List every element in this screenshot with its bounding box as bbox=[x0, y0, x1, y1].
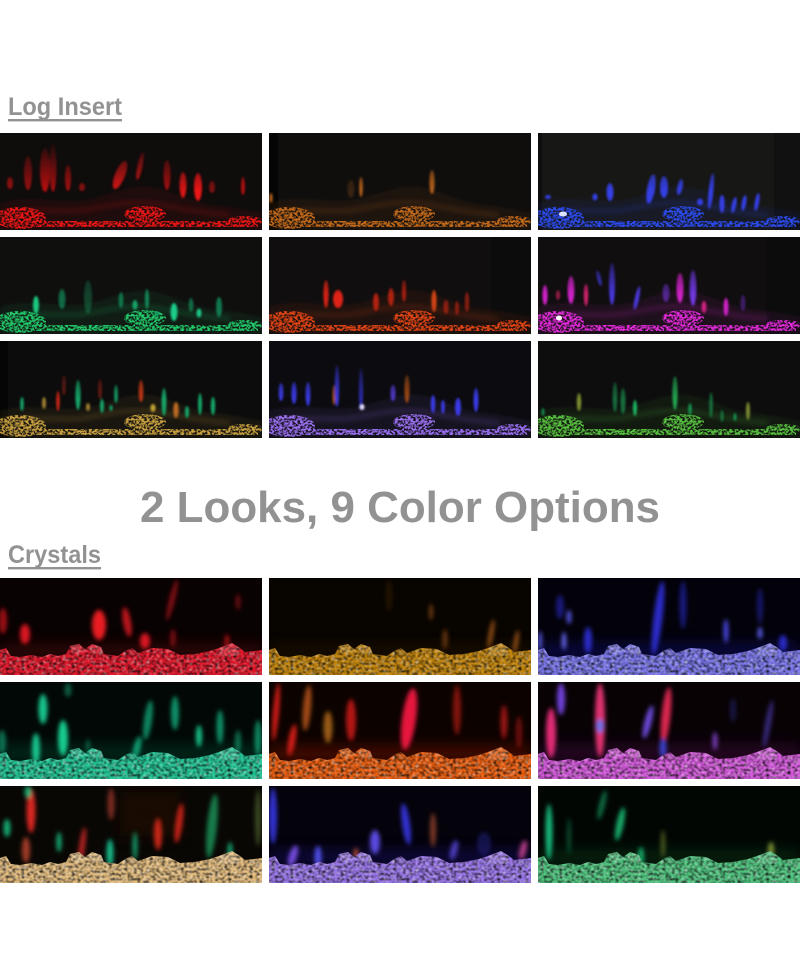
panel: crystals orange bbox=[269, 682, 531, 779]
logs bbox=[0, 290, 263, 334]
crystals bbox=[538, 643, 800, 675]
crystals bbox=[0, 851, 262, 883]
panel: log insert orange-red bbox=[269, 237, 531, 334]
flames bbox=[386, 580, 520, 654]
flames bbox=[269, 788, 529, 868]
flames bbox=[542, 376, 750, 422]
crystals bbox=[269, 747, 531, 779]
heading: Crystals: Crystals bbox=[8, 541, 101, 569]
flames bbox=[33, 280, 222, 321]
flames bbox=[270, 683, 522, 756]
crystals bbox=[0, 747, 262, 779]
logs bbox=[532, 394, 800, 438]
logs bbox=[263, 394, 532, 438]
flames bbox=[269, 170, 435, 203]
panel: crystals purple bbox=[269, 786, 531, 883]
crystals bbox=[269, 643, 531, 675]
panel: crystals amber bbox=[269, 578, 531, 675]
panel: log insert red bbox=[0, 133, 262, 230]
flames bbox=[0, 683, 262, 765]
panel: crystals green bbox=[538, 786, 800, 883]
highlight bbox=[360, 404, 364, 410]
panel: log insert violet bbox=[269, 341, 531, 438]
panel: crystals magenta bbox=[538, 682, 800, 779]
logs bbox=[532, 186, 800, 230]
panel: log insert amber bbox=[269, 133, 531, 230]
panel: crystals multi-colour cream bbox=[0, 786, 262, 883]
panel: log insert magenta bbox=[538, 237, 800, 334]
logs bbox=[0, 394, 263, 438]
flames bbox=[7, 144, 245, 201]
panel: log insert blue bbox=[538, 133, 800, 230]
logs bbox=[0, 186, 263, 230]
panel: log insert green-yellow bbox=[538, 341, 800, 438]
highlight bbox=[559, 212, 567, 216]
flames bbox=[4, 786, 261, 867]
flames bbox=[20, 375, 215, 418]
panel: crystals teal-green bbox=[0, 682, 262, 779]
crystals bbox=[269, 851, 531, 883]
panel: crystals blue bbox=[538, 578, 800, 675]
crystals bbox=[538, 851, 800, 883]
panel: log insert green bbox=[0, 237, 262, 334]
flames bbox=[546, 683, 775, 758]
flames bbox=[323, 280, 469, 315]
flames bbox=[545, 173, 761, 213]
logs bbox=[532, 290, 800, 334]
flames bbox=[279, 365, 478, 416]
flames bbox=[538, 581, 787, 655]
flames bbox=[546, 790, 774, 867]
panel: log insert multi-colour amber base bbox=[0, 341, 262, 438]
crystals bbox=[538, 747, 800, 779]
logs bbox=[263, 186, 532, 230]
crystals bbox=[0, 643, 262, 675]
flames bbox=[0, 579, 241, 650]
flames bbox=[542, 263, 746, 316]
heading: 2 Looks, 9 Color Options: 2 Looks, 9 Color Options bbox=[140, 483, 660, 532]
heading: Log Insert: Log Insert bbox=[8, 93, 123, 121]
logs bbox=[263, 290, 532, 334]
panel: crystals red bbox=[0, 578, 262, 675]
highlight bbox=[556, 316, 562, 320]
